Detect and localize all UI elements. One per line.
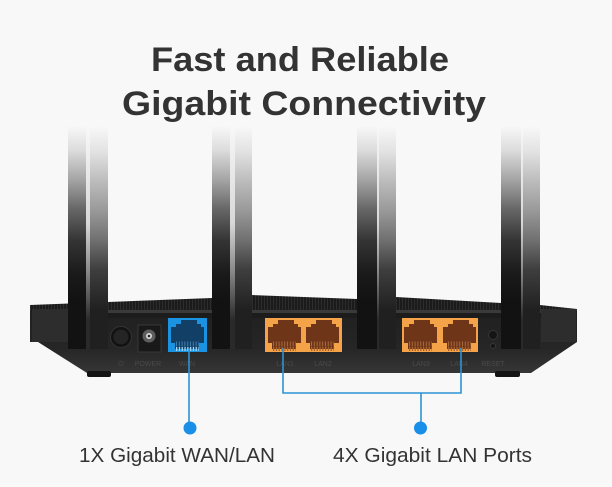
reset button <box>488 330 498 348</box>
connector: LAN callout <box>283 348 461 434</box>
antenna 1 <box>68 126 108 349</box>
antenna 4 <box>501 126 540 349</box>
left end cap <box>32 309 68 342</box>
antenna 3 <box>357 126 396 349</box>
label: WAN: 1X Gigabit WAN/LAN <box>79 444 275 467</box>
title: Gigabit Connectivity <box>122 85 486 123</box>
port labels: POWER <box>135 361 161 368</box>
LAN port 2 <box>304 318 342 352</box>
right end cap <box>541 309 576 342</box>
power button <box>110 326 132 348</box>
WAN port <box>168 318 207 352</box>
port labels: LAN2 <box>314 361 332 368</box>
port labels: LAN4 <box>450 361 468 368</box>
port labels: ⏻ <box>118 360 124 368</box>
title: Fast and Reliable <box>151 41 449 79</box>
title <box>122 41 486 123</box>
router body <box>30 310 577 373</box>
LAN port 4 <box>440 318 478 352</box>
router <box>30 126 577 377</box>
port labels <box>118 360 505 368</box>
power jack <box>138 325 161 352</box>
LAN port 3 <box>402 318 440 352</box>
port labels: WAN <box>179 361 195 368</box>
antenna 2 <box>212 126 252 349</box>
port labels: LAN1 <box>276 361 294 368</box>
port labels: RESET <box>481 361 505 368</box>
port labels: LAN3 <box>412 361 430 368</box>
label: LAN: 4X Gigabit LAN Ports <box>333 444 532 467</box>
feet <box>87 371 520 377</box>
connector: WAN callout <box>184 348 196 434</box>
LAN port 1 <box>265 318 304 352</box>
top vent grille <box>30 295 577 311</box>
